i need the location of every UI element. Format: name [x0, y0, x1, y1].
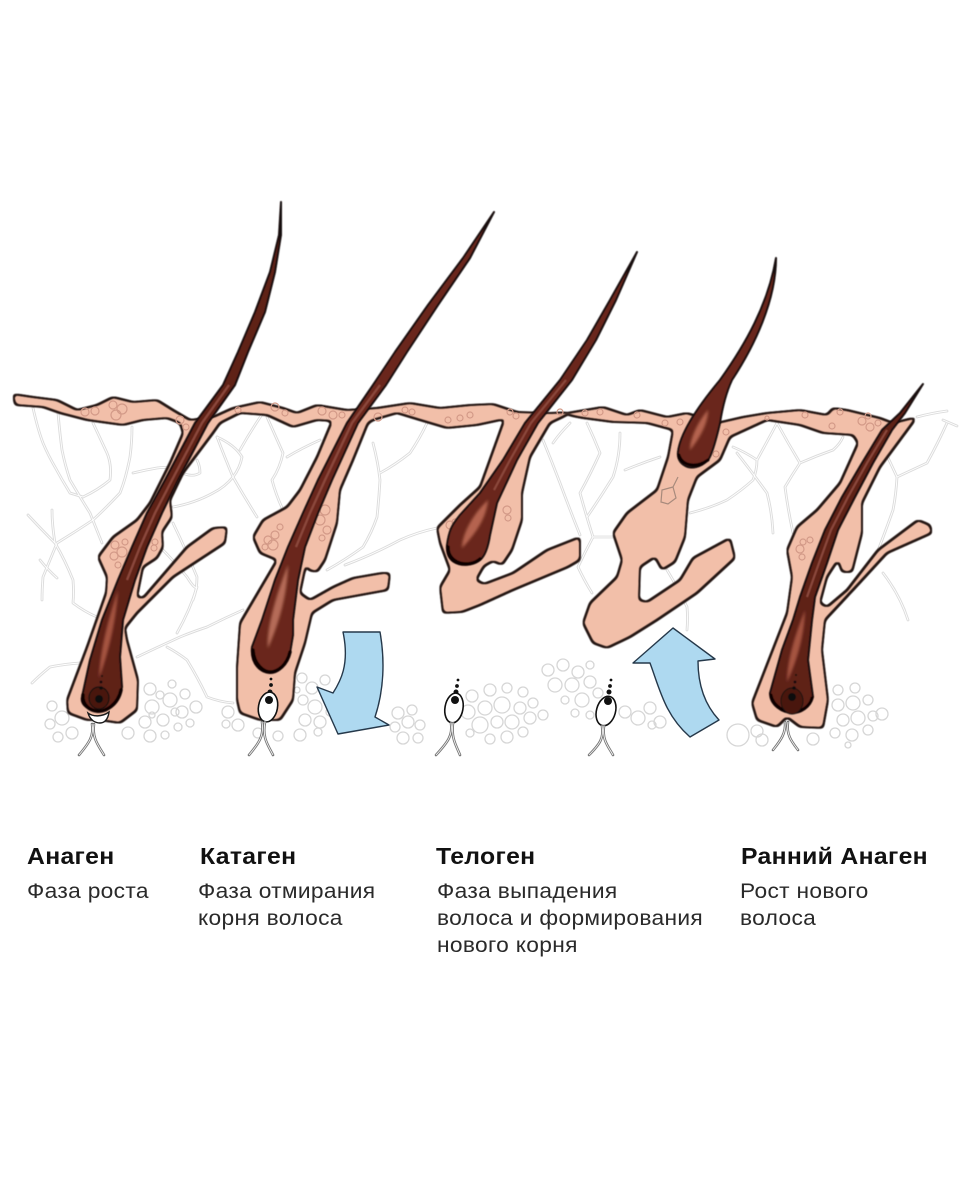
caption: catagen: [198, 843, 375, 930]
papilla and nerve: anagen: [79, 712, 109, 755]
hair shaft: anagen: [82, 202, 281, 712]
caption: early anagen: Рост нового: [740, 880, 869, 903]
hair shaft: club hair: [678, 258, 776, 467]
hair shaft: early anagen: [770, 384, 923, 714]
caption: anagen: [27, 843, 149, 903]
nerve: early anagen: [773, 722, 798, 750]
caption: catagen: Катаген: [200, 843, 296, 869]
caption: anagen: Фаза роста: [27, 880, 149, 903]
illustration: hair growth cycle: [12, 200, 958, 756]
blood vessels: [28, 408, 957, 703]
caption: catagen: Фаза отмирания: [198, 880, 375, 903]
caption: telogen: [436, 843, 703, 957]
sebaceous gland cells: [81, 401, 881, 568]
caption: catagen: корня волоса: [198, 907, 343, 930]
papilla and nerve: early telogen: [589, 679, 619, 755]
caption: early anagen: [740, 843, 928, 930]
hair shaft: telogen: [447, 252, 637, 565]
fat cells: [45, 659, 888, 748]
caption: early anagen: волоса: [740, 907, 816, 930]
hair shaft: catagen: [252, 212, 494, 673]
skin layer and follicles: [13, 394, 932, 728]
papilla and nerve: telogen: [436, 679, 465, 755]
caption: anagen: Анаген: [27, 843, 115, 869]
follicle remnant in early growth: [661, 477, 678, 504]
caption: telogen: Телоген: [436, 843, 535, 869]
caption: telogen: нового корня: [437, 934, 578, 957]
caption: early anagen: Ранний Анаген: [741, 843, 928, 869]
caption: telogen: Фаза выпадения: [437, 880, 618, 903]
caption: telogen: волоса и формирования: [437, 907, 703, 930]
arrow: down to telogen: [317, 632, 389, 734]
arrow: up to anagen: [633, 628, 719, 737]
papilla and nerve: catagen: [249, 678, 280, 755]
